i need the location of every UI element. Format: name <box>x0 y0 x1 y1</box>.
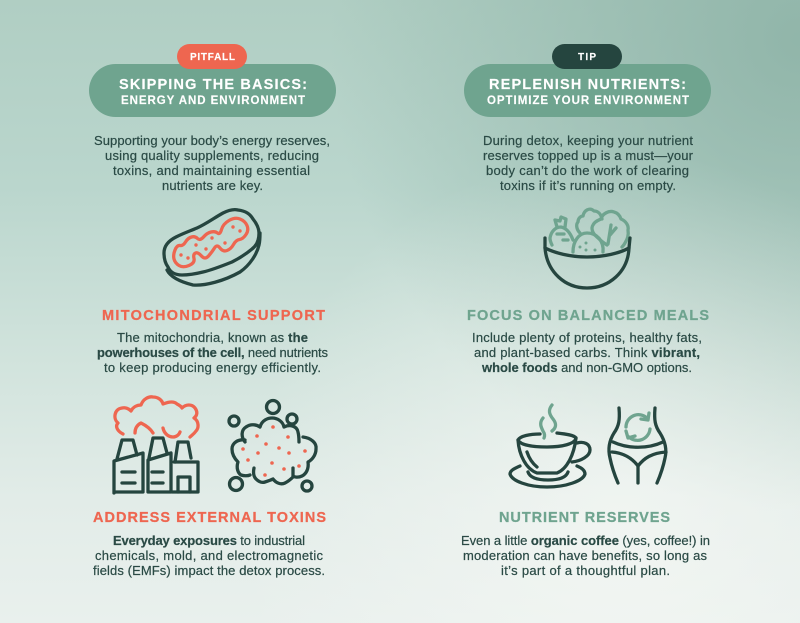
text: focus on balanced meals: and plant-based carbs. Think vibrant, <box>474 345 700 360</box>
intro text: tip: body can’t do the work of clearing <box>486 163 689 178</box>
intro text: tip: During detox, keeping your nutrient <box>483 133 693 148</box>
text: address external toxins <box>93 533 325 578</box>
text: mitochondrial support: The mitochondria, known as the <box>117 330 308 345</box>
text: nutrient reserves <box>461 533 710 578</box>
heading pill: skipping the basics: ENERGY AND ENVIRONMENT <box>121 95 305 107</box>
heading: address external toxins: ADDRESS EXTERNAL TOXINS <box>93 510 326 526</box>
heading pill: replenish nutrients <box>464 64 711 117</box>
heading pill: replenish nutrients: REPLENISH NUTRIENTS: <box>489 77 686 93</box>
intro text: pitfall: nutrients are key. <box>162 178 263 193</box>
heading: mitochondrial support: MITOCHONDRIAL SUPPORT <box>102 308 325 324</box>
intro text: pitfall: using quality supplements, reducing <box>105 148 319 163</box>
intro text: pitfall: toxins, and maintaining essential <box>113 163 310 178</box>
tag: pitfall: PITFALL <box>190 52 235 63</box>
text: nutrient reserves: moderation can have benefits, so long as <box>463 548 708 563</box>
text: address external toxins: fields (EMFs) impact the detox process. <box>93 563 325 578</box>
heading: nutrient reserves: NUTRIENT RESERVES <box>499 510 670 526</box>
panel: pitfall column <box>89 44 336 578</box>
text: focus on balanced meals <box>472 330 702 375</box>
text: mitochondrial support: to keep producing energy efficiently. <box>104 360 321 375</box>
text: focus on balanced meals: whole foods and non-GMO options. <box>481 360 692 375</box>
heading pill: skipping the basics: SKIPPING THE BASICS: <box>119 77 307 93</box>
heading: focus on balanced meals: FOCUS ON BALANCED MEALS <box>467 308 709 324</box>
icon: waist with cycle arrows <box>609 408 666 483</box>
text: mitochondrial support: powerhouses of the cell, need nutrients <box>97 345 328 360</box>
text: address external toxins: chemicals, mold, and electromagnetic <box>95 548 324 563</box>
text: address external toxins: Everyday exposures to industrial <box>113 533 305 548</box>
tag: pitfall <box>177 44 247 69</box>
intro text: tip <box>483 133 694 193</box>
text: focus on balanced meals: Include plenty of proteins, healthy fats, <box>472 330 702 345</box>
heading pill: skipping the basics <box>89 64 336 117</box>
panel: tip column <box>461 44 711 578</box>
text: nutrient reserves: it’s part of a thoughtful plan. <box>501 563 670 578</box>
intro text: tip: toxins if it’s running on empty. <box>500 178 676 193</box>
text: nutrient reserves: Even a little organic coffee (yes, coffee!) in <box>461 533 710 548</box>
icon: salad bowl <box>545 209 630 288</box>
icon: coffee cup <box>510 405 590 487</box>
text: mitochondrial support <box>97 330 328 375</box>
icon: mitochondrion <box>164 210 260 285</box>
heading pill: replenish nutrients: OPTIMIZE YOUR ENVIRONMENT <box>487 95 689 107</box>
icon: toxin cloud <box>229 400 316 491</box>
icon: factory <box>114 397 198 493</box>
tag: tip <box>552 44 622 69</box>
tag: tip: TIP <box>578 52 596 63</box>
intro text: pitfall: Supporting your body’s energy reserves, <box>94 133 330 148</box>
intro text: pitfall <box>94 133 330 193</box>
intro text: tip: reserves topped up is a must—your <box>483 148 694 163</box>
